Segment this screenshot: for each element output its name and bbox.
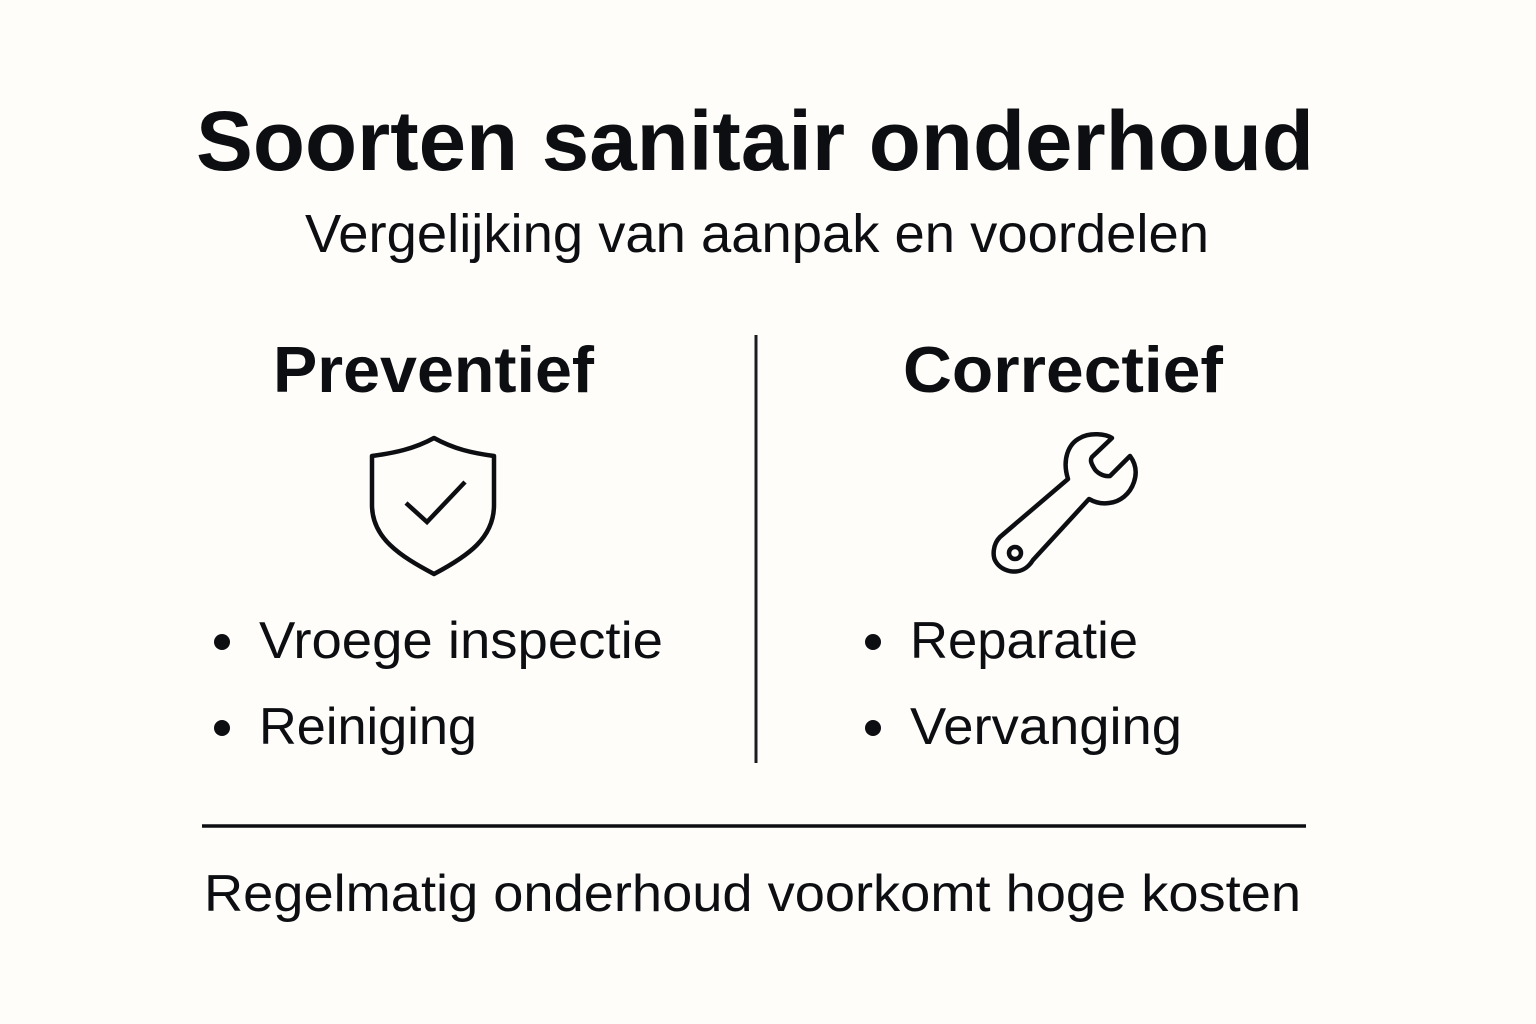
list: correctief items — [865, 612, 1182, 756]
icon: shield with check — [372, 438, 494, 574]
bullet item: reparatie: Reparatie — [910, 612, 1138, 670]
icon: wrench — [994, 434, 1136, 572]
bullet item: vervanging: Vervanging — [910, 698, 1182, 756]
vertical divider — [754, 335, 758, 763]
title: Soorten sanitair onderhoud — [196, 94, 1314, 188]
panel: correctief — [865, 333, 1223, 756]
footer statement: Regelmatig onderhoud voorkomt hoge kosten — [204, 865, 1301, 923]
heading: correctief: Correctief — [903, 333, 1223, 406]
bullet item: vroege inspectie: Vroege inspectie — [259, 612, 663, 670]
bullet item: reiniging: Reiniging — [259, 698, 477, 756]
horizontal divider — [202, 824, 1306, 828]
heading: preventief: Preventief — [273, 333, 594, 406]
panel: preventief — [214, 333, 663, 756]
subtitle: Vergelijking van aanpak en voordelen — [305, 204, 1209, 264]
list: preventief items — [214, 612, 663, 756]
